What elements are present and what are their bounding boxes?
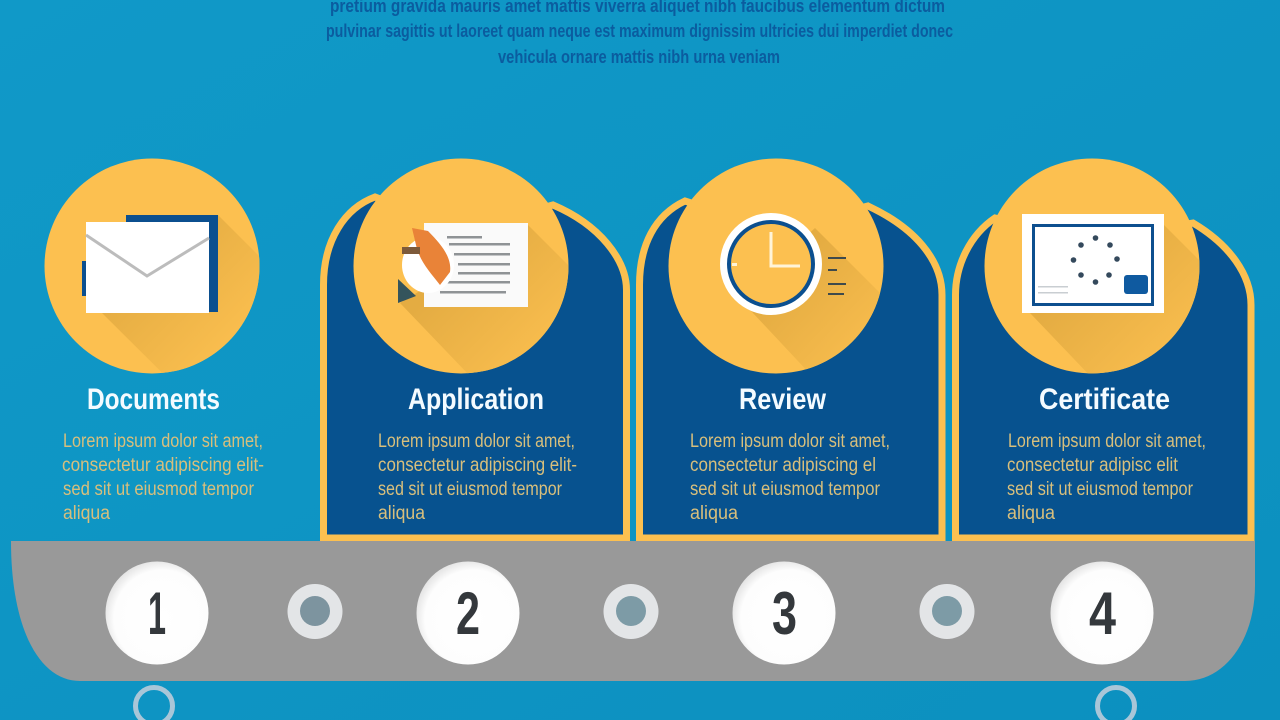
- step number 2: [416, 562, 520, 664]
- step number 1: 1: [148, 580, 166, 647]
- body text: certificate: aliqua: [1007, 503, 1055, 524]
- body text: documents: [62, 431, 264, 524]
- body text: review: Lorem ipsum dolor sit amet,: [690, 431, 890, 452]
- body text: review: aliqua: [690, 503, 738, 524]
- body text: certificate: sed sit ut eiusmod tempor: [1007, 479, 1194, 500]
- step number 4: [1050, 562, 1154, 664]
- step number 2: 2: [456, 580, 480, 647]
- step 3: review clock icon: [668, 158, 884, 374]
- grey step track: [11, 541, 1255, 681]
- body text: application: Lorem ipsum dolor sit amet,: [378, 431, 575, 452]
- lower ring right: [1098, 688, 1134, 720]
- step number 3: [732, 562, 836, 664]
- connector dot 1: [288, 584, 342, 639]
- intro text: vehicula ornare mattis nibh urna veniam: [498, 47, 780, 67]
- step number 3: 3: [772, 580, 797, 647]
- heading: application: Application: [408, 383, 544, 416]
- body text: documents: Lorem ipsum dolor sit amet,: [63, 431, 263, 452]
- step number 4: 4: [1089, 580, 1117, 647]
- step 2: application icon: [354, 158, 568, 374]
- body text: certificate: consectetur adipisc elit: [1007, 455, 1179, 476]
- intro text: [326, 0, 953, 67]
- step 4: certificate icon: [984, 158, 1200, 374]
- lower ring left: [136, 688, 172, 720]
- heading: review: Review: [739, 383, 827, 416]
- body text: application: sed sit ut eiusmod tempor: [378, 479, 563, 500]
- body text: documents: sed sit ut eiusmod tempor: [63, 479, 255, 500]
- step 1: documents icon: [44, 158, 260, 374]
- body text: documents: aliqua: [63, 503, 110, 524]
- panel: application card: [324, 197, 626, 538]
- body text: application: aliqua: [378, 503, 425, 524]
- connector dot 3: [920, 584, 974, 639]
- heading: certificate: Certificate: [1039, 383, 1170, 416]
- panel: review card: [640, 201, 942, 538]
- connector dot 2: [604, 584, 658, 639]
- body text: review: [690, 431, 890, 524]
- body text: review: sed sit ut eiusmod tempor: [690, 479, 881, 500]
- body text: application: consectetur adipiscing elit-: [378, 455, 577, 476]
- body text: review: consectetur adipiscing el: [690, 455, 876, 476]
- heading: documents: Documents: [87, 383, 220, 416]
- body text: certificate: [1007, 431, 1206, 524]
- step number 1: [106, 562, 208, 664]
- body text: documents: consectetur adipiscing elit-: [62, 455, 264, 476]
- panel: certificate card: [956, 218, 1251, 538]
- intro text: pulvinar sagittis ut laoreet quam neque est maximum dignissim ultricies dui imperdiet donec: [326, 21, 953, 41]
- body text: certificate: Lorem ipsum dolor sit amet,: [1008, 431, 1206, 452]
- body text: application: [378, 431, 577, 524]
